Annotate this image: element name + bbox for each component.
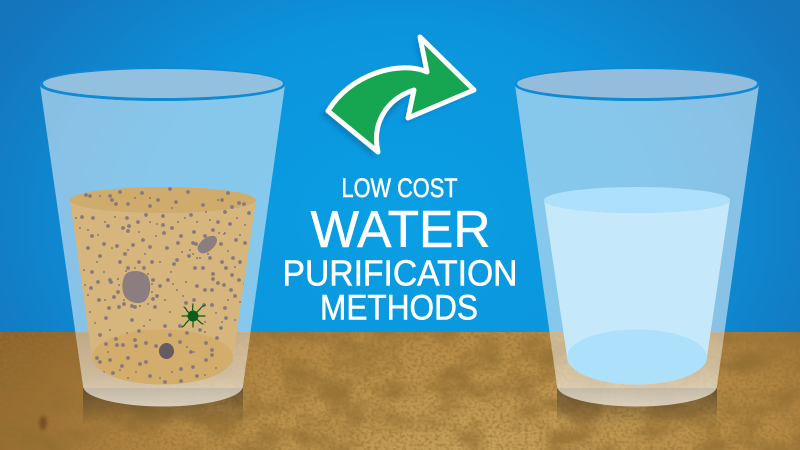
left glass: dirty water bbox=[40, 67, 285, 425]
glass body bbox=[515, 85, 759, 406]
small dirt blob upper right bbox=[198, 236, 217, 253]
clean water bottom bbox=[567, 330, 707, 384]
background: blue wall bbox=[0, 0, 800, 333]
right glass: clean water bbox=[514, 67, 760, 425]
clean water surface bbox=[544, 187, 730, 213]
arrow shape bbox=[328, 37, 474, 152]
title line: methods: METHODS bbox=[320, 288, 478, 328]
title bbox=[282, 173, 518, 328]
arrow bbox=[321, 37, 474, 159]
dirty water bottom bbox=[92, 330, 233, 384]
background: wooden table bbox=[0, 332, 800, 450]
dirty water surface bbox=[70, 187, 256, 213]
green germ bbox=[182, 304, 205, 327]
glass rim bbox=[40, 67, 285, 101]
dirt specks bbox=[76, 189, 249, 382]
clean water body bbox=[544, 200, 730, 384]
title line: purification: PURIFICATION bbox=[282, 252, 518, 294]
glass shadow bbox=[557, 388, 717, 425]
glass rim bbox=[514, 67, 760, 101]
dirty water body bbox=[70, 200, 256, 384]
glass body bbox=[40, 85, 285, 406]
glass shadow bbox=[83, 388, 243, 425]
arrow shadow bbox=[321, 37, 471, 159]
large dirt blob bbox=[122, 271, 150, 303]
dark dirt blob bbox=[159, 343, 174, 359]
title line: water: WATER bbox=[310, 200, 490, 258]
title line: low cost: LOW COST bbox=[342, 173, 458, 203]
